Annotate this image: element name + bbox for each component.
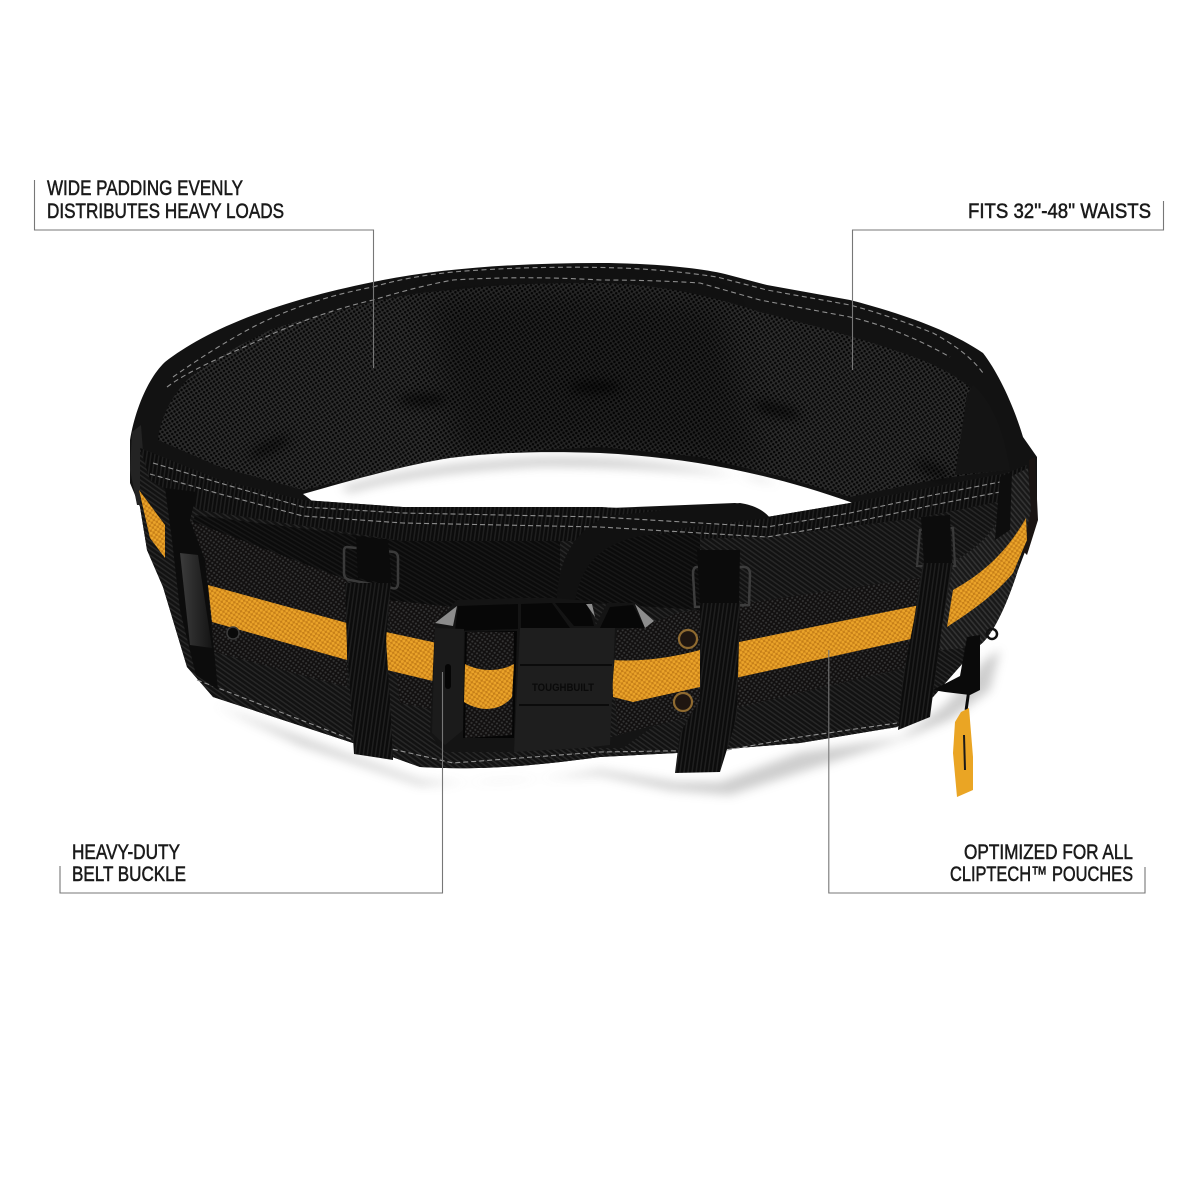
- back edge stitching: [167, 267, 983, 387]
- text: wide padding: WIDE PADDING EVENLY: [47, 177, 243, 200]
- text: waist fit: FITS 32''-48'' WAISTS: [968, 200, 1151, 223]
- right vertical loop two: [898, 563, 953, 730]
- belt silhouette: [130, 263, 1037, 768]
- buckle bevels: [435, 604, 654, 628]
- buckle slot opening: [463, 631, 517, 738]
- padded end strap right: [995, 472, 1012, 540]
- right end webbing: [940, 468, 1031, 650]
- drop shadow under belt: [215, 650, 1000, 795]
- right end strap: [1022, 457, 1038, 555]
- buckle slit: [445, 664, 451, 689]
- text: belt buckle: BELT BUCKLE: [72, 863, 186, 886]
- far left yellow stripe: [139, 490, 165, 558]
- left yellow stripe: [208, 585, 347, 660]
- mesh shading: [430, 293, 760, 470]
- left end strap: [130, 425, 147, 505]
- text: wide padding: DISTRIBUTES HEAVY LOADS: [47, 200, 284, 223]
- rivet left: [227, 627, 239, 639]
- mesh pillow dimples: [248, 381, 951, 482]
- buckle left frame: [432, 628, 464, 745]
- left webbing strap: [188, 520, 347, 687]
- buckle centre seams: [519, 665, 612, 705]
- buckle body: [430, 598, 655, 752]
- padded mesh lining: [158, 283, 1008, 497]
- centre webbing strap: [387, 600, 453, 713]
- text: belt buckle: HEAVY-DUTY: [72, 841, 180, 864]
- far right yellow stripe: [947, 518, 1027, 627]
- far right D-ring: [917, 515, 955, 566]
- buckle: [430, 598, 655, 752]
- buckle centre body: [514, 628, 615, 752]
- front panel: [140, 448, 1030, 768]
- left pocket shadow: [190, 515, 560, 610]
- bronze rivets: [674, 630, 697, 711]
- callout: belt buckle: [60, 672, 442, 893]
- metal clip: [180, 553, 212, 648]
- flap lower panel: [575, 530, 700, 610]
- text: cliptech pouches: OPTIMIZED FOR ALL: [964, 841, 1133, 864]
- right D-ring: [693, 550, 750, 607]
- callout: wide padding: [34, 177, 374, 368]
- hole inside belt: [303, 452, 853, 517]
- zipper pieces: [933, 629, 997, 710]
- buckle top dark band: [455, 603, 645, 631]
- callout: cliptech pouches: [829, 650, 1145, 893]
- callout: waist fit: [852, 200, 1164, 370]
- buckle brand: TOUGHBUILT: [532, 682, 594, 694]
- left outer loop: [165, 488, 218, 690]
- right yellow stripe: [612, 605, 920, 702]
- buckle side flap: [557, 503, 770, 602]
- text: cliptech pouches: CLIPTECH™ POUCHES: [950, 863, 1133, 886]
- inner shadow in hole: [340, 458, 780, 492]
- strap through buckle: [465, 632, 514, 738]
- yellow pull tab: [953, 708, 973, 797]
- front stitching: [150, 463, 1000, 763]
- dark inner end panel: [955, 385, 1010, 475]
- centre yellow stripe: [386, 632, 437, 682]
- belt: [130, 263, 1038, 797]
- front top stitched band: [140, 448, 1029, 541]
- right webbing strap: [610, 578, 920, 735]
- left D-ring: [344, 536, 398, 588]
- left vertical loop: [345, 583, 393, 760]
- right vertical loop one: [675, 603, 740, 773]
- strap yellow in buckle: [464, 664, 514, 709]
